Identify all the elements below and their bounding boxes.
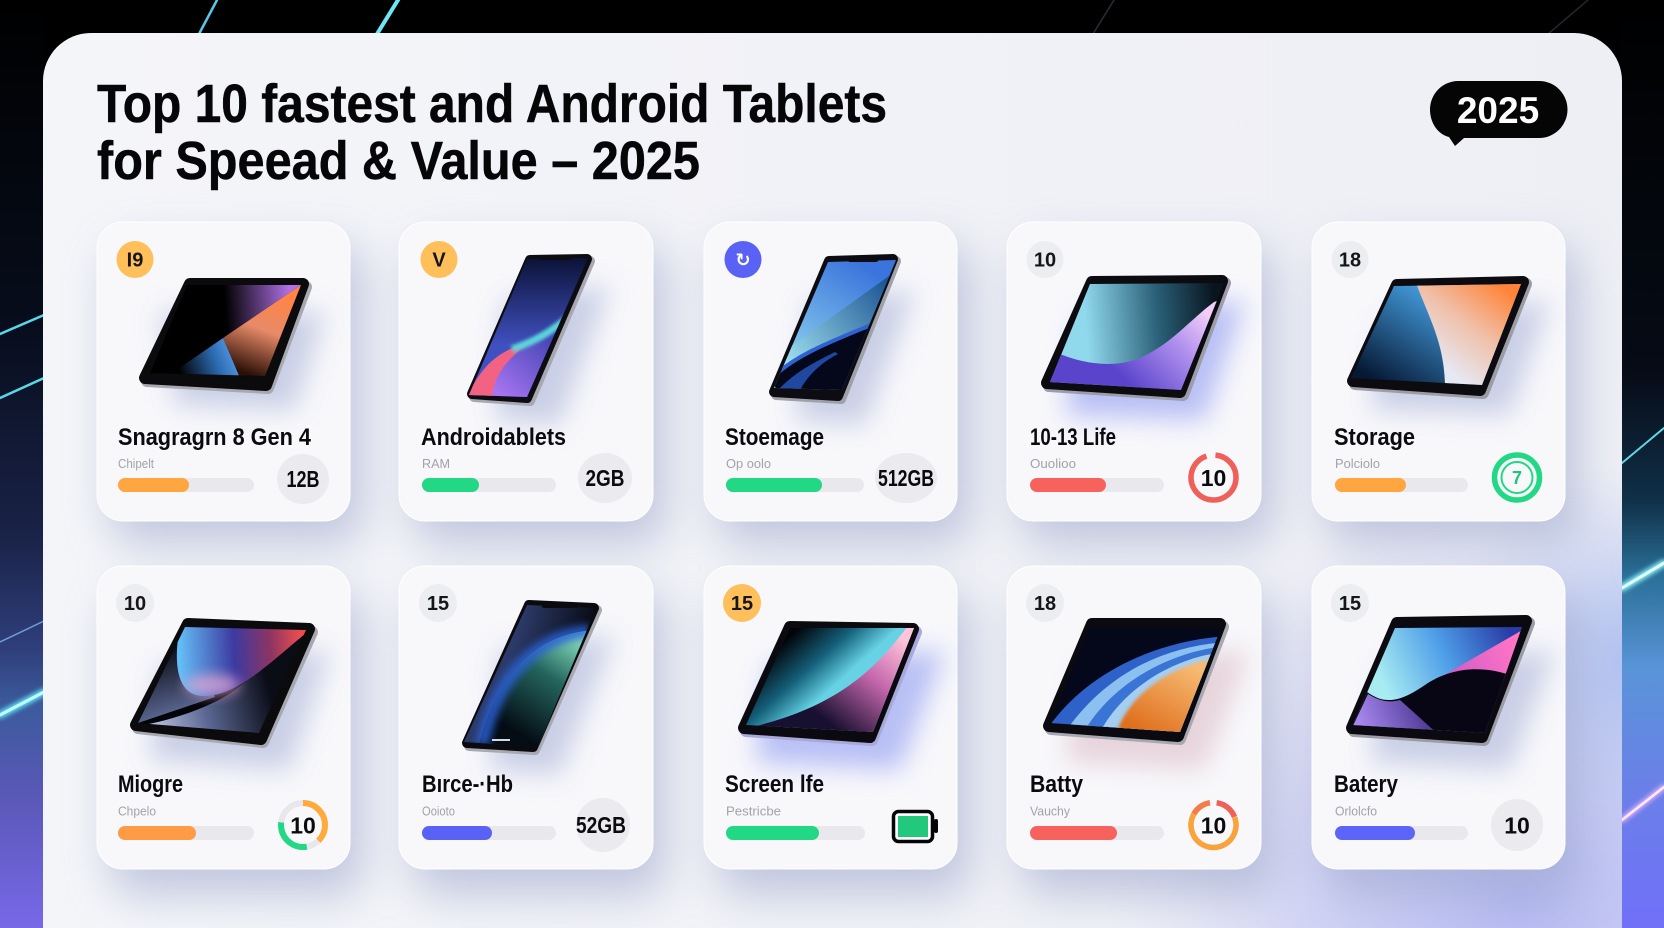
sublabel 10: Orlolcfo bbox=[1335, 804, 1377, 818]
bar 7 bbox=[422, 826, 556, 840]
name 3: Stoemage bbox=[725, 424, 824, 451]
card 10 bbox=[1312, 566, 1565, 869]
rank badge 6: 10 bbox=[124, 593, 146, 615]
rank badge 7 bbox=[419, 584, 457, 622]
card 9 bbox=[1007, 566, 1261, 869]
ring 9: 10 bbox=[1201, 812, 1226, 838]
rank badge 7: 15 bbox=[427, 593, 449, 615]
ring 6: 10 bbox=[290, 812, 316, 838]
rank badge 8: 15 bbox=[731, 593, 753, 615]
tablet 1 bbox=[140, 280, 325, 410]
rank badge 3: ↻ bbox=[735, 250, 751, 271]
card 2 bbox=[399, 222, 653, 521]
rank badge 8 bbox=[723, 584, 761, 622]
rank badge 2 bbox=[420, 241, 458, 278]
sublabel 6: Chpelo bbox=[118, 804, 156, 818]
sublabel 7: Ooioto bbox=[422, 804, 455, 818]
value 7: 52GB bbox=[576, 812, 626, 838]
rank badge 10 bbox=[1331, 584, 1369, 622]
title: Top 10 fastest and Android Tablets bbox=[97, 74, 887, 134]
rank badge 9: 18 bbox=[1034, 593, 1056, 615]
bar 2 bbox=[422, 478, 556, 492]
sublabel 1: Chipelt bbox=[118, 457, 154, 471]
ring 6 bbox=[278, 800, 328, 850]
value 1 bbox=[277, 454, 329, 504]
rank badge 5: 18 bbox=[1339, 250, 1361, 272]
rank badge 3 bbox=[724, 241, 762, 278]
value 10: 10 bbox=[1504, 812, 1530, 838]
ring 4 bbox=[1189, 453, 1238, 502]
rank badge 5 bbox=[1332, 241, 1368, 278]
rank badge 9 bbox=[1026, 584, 1064, 622]
name 8: Screen lfe bbox=[725, 771, 824, 798]
bar 3 bbox=[726, 478, 864, 492]
card 7 bbox=[399, 566, 653, 869]
card shadows bbox=[110, 245, 1579, 895]
bar 9 bbox=[1030, 826, 1164, 840]
bar 5 bbox=[1335, 478, 1468, 492]
card 1 bbox=[97, 222, 350, 521]
value 7 bbox=[576, 798, 630, 852]
rank badge 4: 10 bbox=[1034, 250, 1056, 272]
name 4: 10-13 Life bbox=[1030, 424, 1116, 451]
phone 2 bbox=[460, 250, 610, 425]
phone 3 bbox=[770, 255, 915, 425]
icon: battery bbox=[894, 812, 938, 842]
sublabel 3: Op oolo bbox=[726, 457, 771, 471]
tablet 10 bbox=[1345, 620, 1555, 770]
card 6 bbox=[97, 566, 350, 869]
value 3: 512GB bbox=[878, 465, 934, 491]
rank badge 10: 15 bbox=[1339, 593, 1361, 615]
name 6: Miogre bbox=[118, 771, 183, 798]
title: for Speead & Value – 2025 bbox=[97, 131, 700, 191]
rank badge 6 bbox=[116, 584, 154, 622]
tablet 6 bbox=[130, 620, 330, 770]
ring 4: 10 bbox=[1201, 465, 1226, 491]
bar 8 bbox=[726, 826, 865, 840]
name 9: Batty bbox=[1030, 771, 1084, 798]
name 10: Batery bbox=[1334, 771, 1399, 798]
name 5: Storage bbox=[1334, 424, 1415, 451]
tablet 8 bbox=[740, 622, 945, 770]
ring 9 bbox=[1183, 794, 1244, 856]
bar 4 bbox=[1030, 478, 1164, 492]
name 1: Snagragrn 8 Gen 4 bbox=[118, 424, 312, 451]
card 5 bbox=[1312, 222, 1565, 521]
card 8 bbox=[704, 566, 957, 869]
tablet 5 bbox=[1345, 280, 1550, 415]
rank badge 4 bbox=[1026, 241, 1064, 278]
bar 6 bbox=[118, 826, 254, 840]
title bbox=[97, 74, 887, 191]
value 1: 12B bbox=[286, 466, 320, 492]
value 2: 2GB bbox=[586, 465, 624, 491]
phone 7 bbox=[460, 600, 615, 775]
bar 1 bbox=[118, 478, 254, 492]
value 2 bbox=[578, 453, 632, 503]
rank badge 1: I9 bbox=[127, 250, 143, 272]
sublabel 8: Pestricbe bbox=[726, 804, 781, 818]
year badge: 2025 bbox=[1457, 90, 1539, 131]
name 7: Bırce-·Hb bbox=[422, 771, 513, 798]
sublabel 5: Polciolo bbox=[1335, 457, 1380, 471]
card 4 bbox=[1007, 222, 1261, 521]
name 2: Androidablets bbox=[421, 424, 566, 451]
card 3 bbox=[704, 222, 957, 521]
tablet 4 bbox=[1040, 278, 1245, 420]
tablet 9 bbox=[1040, 620, 1250, 770]
ring 5 bbox=[1494, 455, 1540, 500]
year badge bbox=[1430, 81, 1568, 146]
ring 5: 7 bbox=[1512, 468, 1522, 488]
value 10 bbox=[1491, 799, 1543, 851]
sublabel 9: Vauchy bbox=[1030, 804, 1071, 818]
sublabel 2: RAM bbox=[422, 457, 450, 471]
value 3 bbox=[875, 453, 937, 503]
bar 10 bbox=[1335, 826, 1468, 840]
sublabel 4: Ouolioo bbox=[1030, 457, 1076, 471]
rank badge 2: V bbox=[432, 250, 446, 272]
rank badge 1 bbox=[116, 241, 154, 278]
